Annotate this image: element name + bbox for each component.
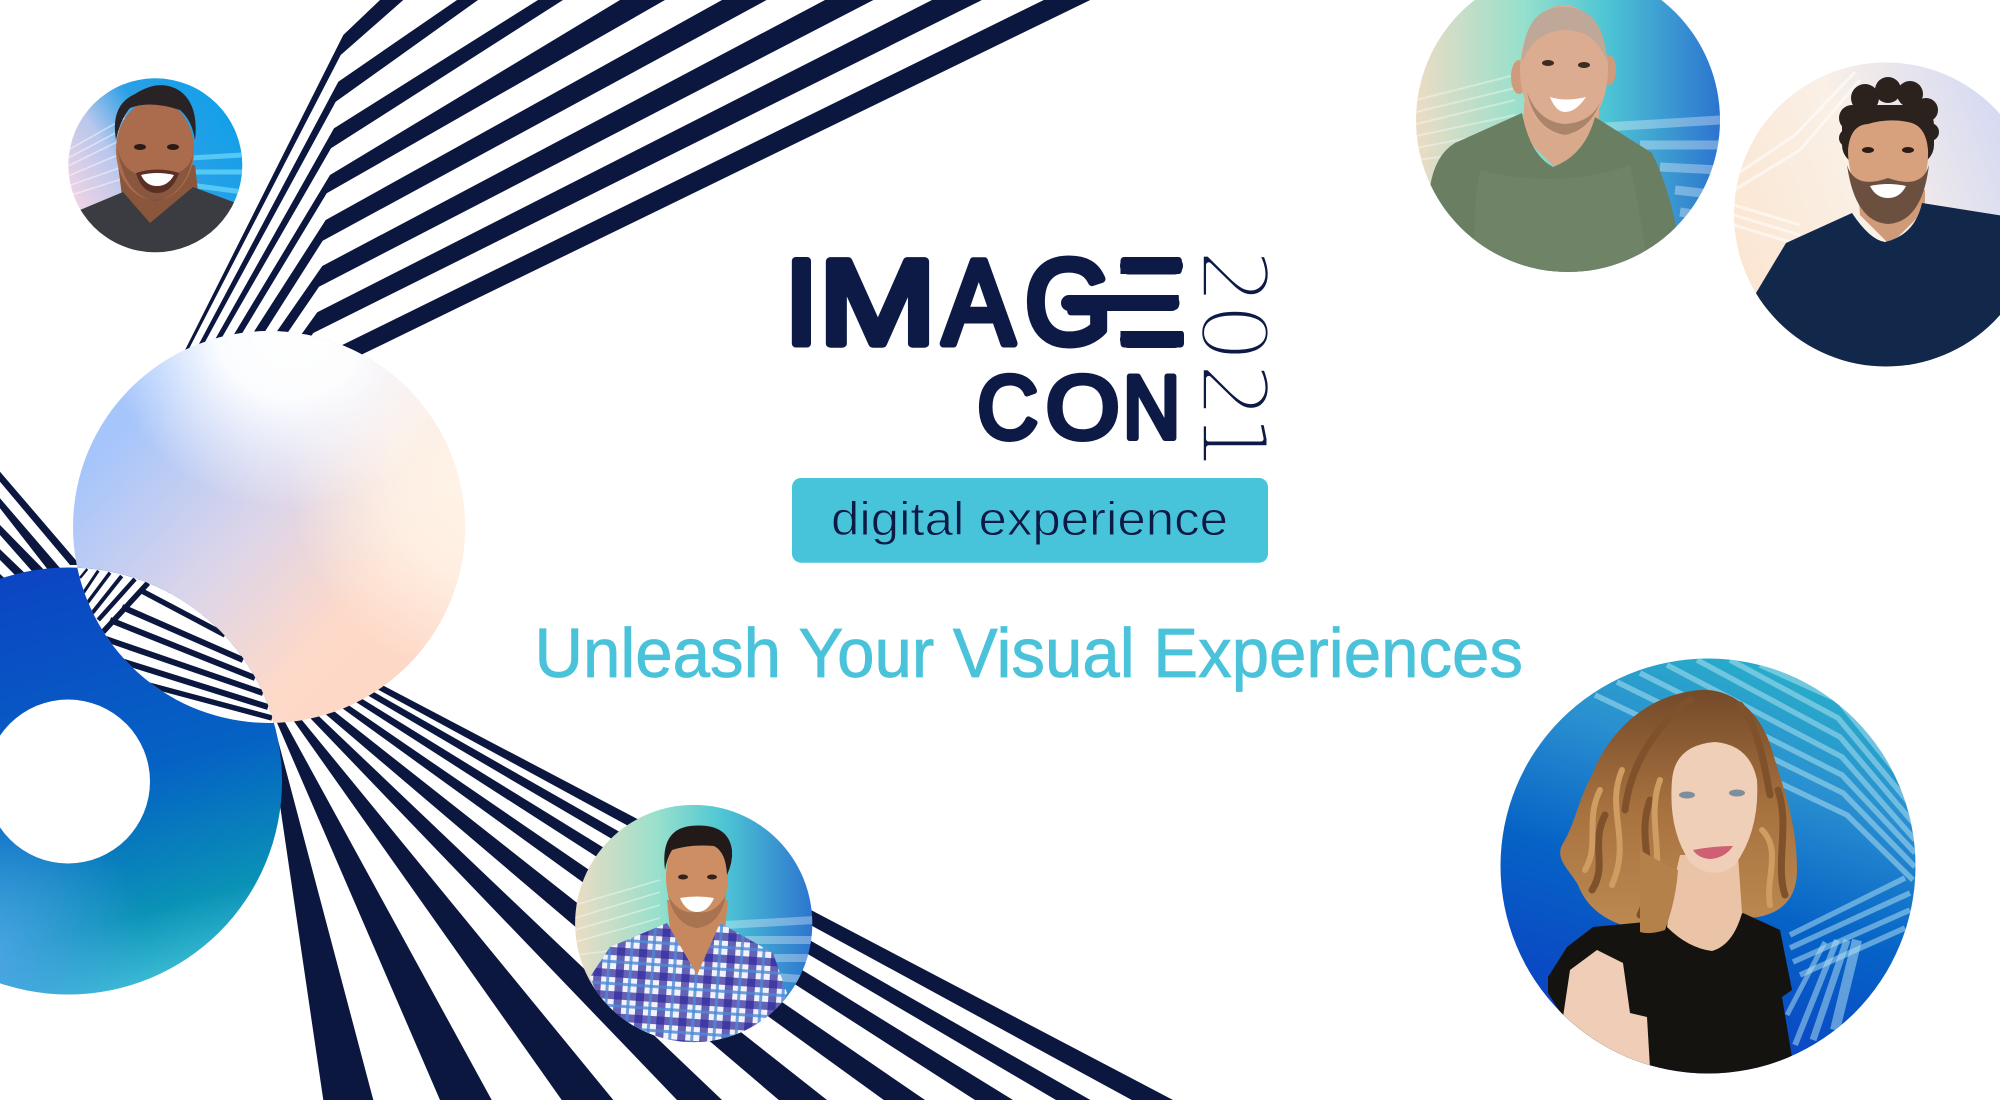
wordmark CON: N bbox=[1123, 358, 1180, 457]
speaker portrait: man with plaid shirt bbox=[575, 805, 815, 1050]
wordmark CON bbox=[978, 358, 1180, 458]
wordmark CON: O bbox=[1046, 358, 1119, 457]
blue donut bbox=[0, 568, 282, 994]
wordmark IMAGE: A bbox=[943, 236, 1014, 370]
tagline: Unleash Your Visual Experiences bbox=[534, 614, 1523, 692]
wordmark IMAGE: M bbox=[819, 235, 936, 369]
badge: digital experience bbox=[792, 478, 1268, 563]
badge: digital experience: digital experience bbox=[831, 492, 1228, 545]
wordmark IMAGE: I bbox=[785, 236, 818, 370]
wordmark IMAGE: G bbox=[1025, 235, 1112, 370]
upper stripe fan bbox=[175, 0, 1090, 372]
speaker portrait: woman bbox=[1500, 658, 1916, 1085]
speaker portrait: curly-haired man bbox=[1734, 62, 2000, 380]
vertical year: 2021 bbox=[1178, 247, 1287, 472]
lower stripe fan bbox=[266, 669, 1173, 1100]
speaker portrait: bald man bbox=[1416, 0, 1720, 285]
gradient sphere bbox=[73, 331, 465, 723]
speaker portrait: man top left bbox=[68, 78, 243, 260]
wordmark CON: C bbox=[978, 359, 1038, 458]
wordmark IMAGE bbox=[785, 235, 1185, 370]
striped lens between sphere and donut bbox=[77, 568, 274, 723]
logo: ImageCon 2021 bbox=[785, 235, 1287, 472]
wordmark IMAGE: E bbox=[1115, 235, 1185, 369]
left stripes bbox=[0, 472, 80, 585]
